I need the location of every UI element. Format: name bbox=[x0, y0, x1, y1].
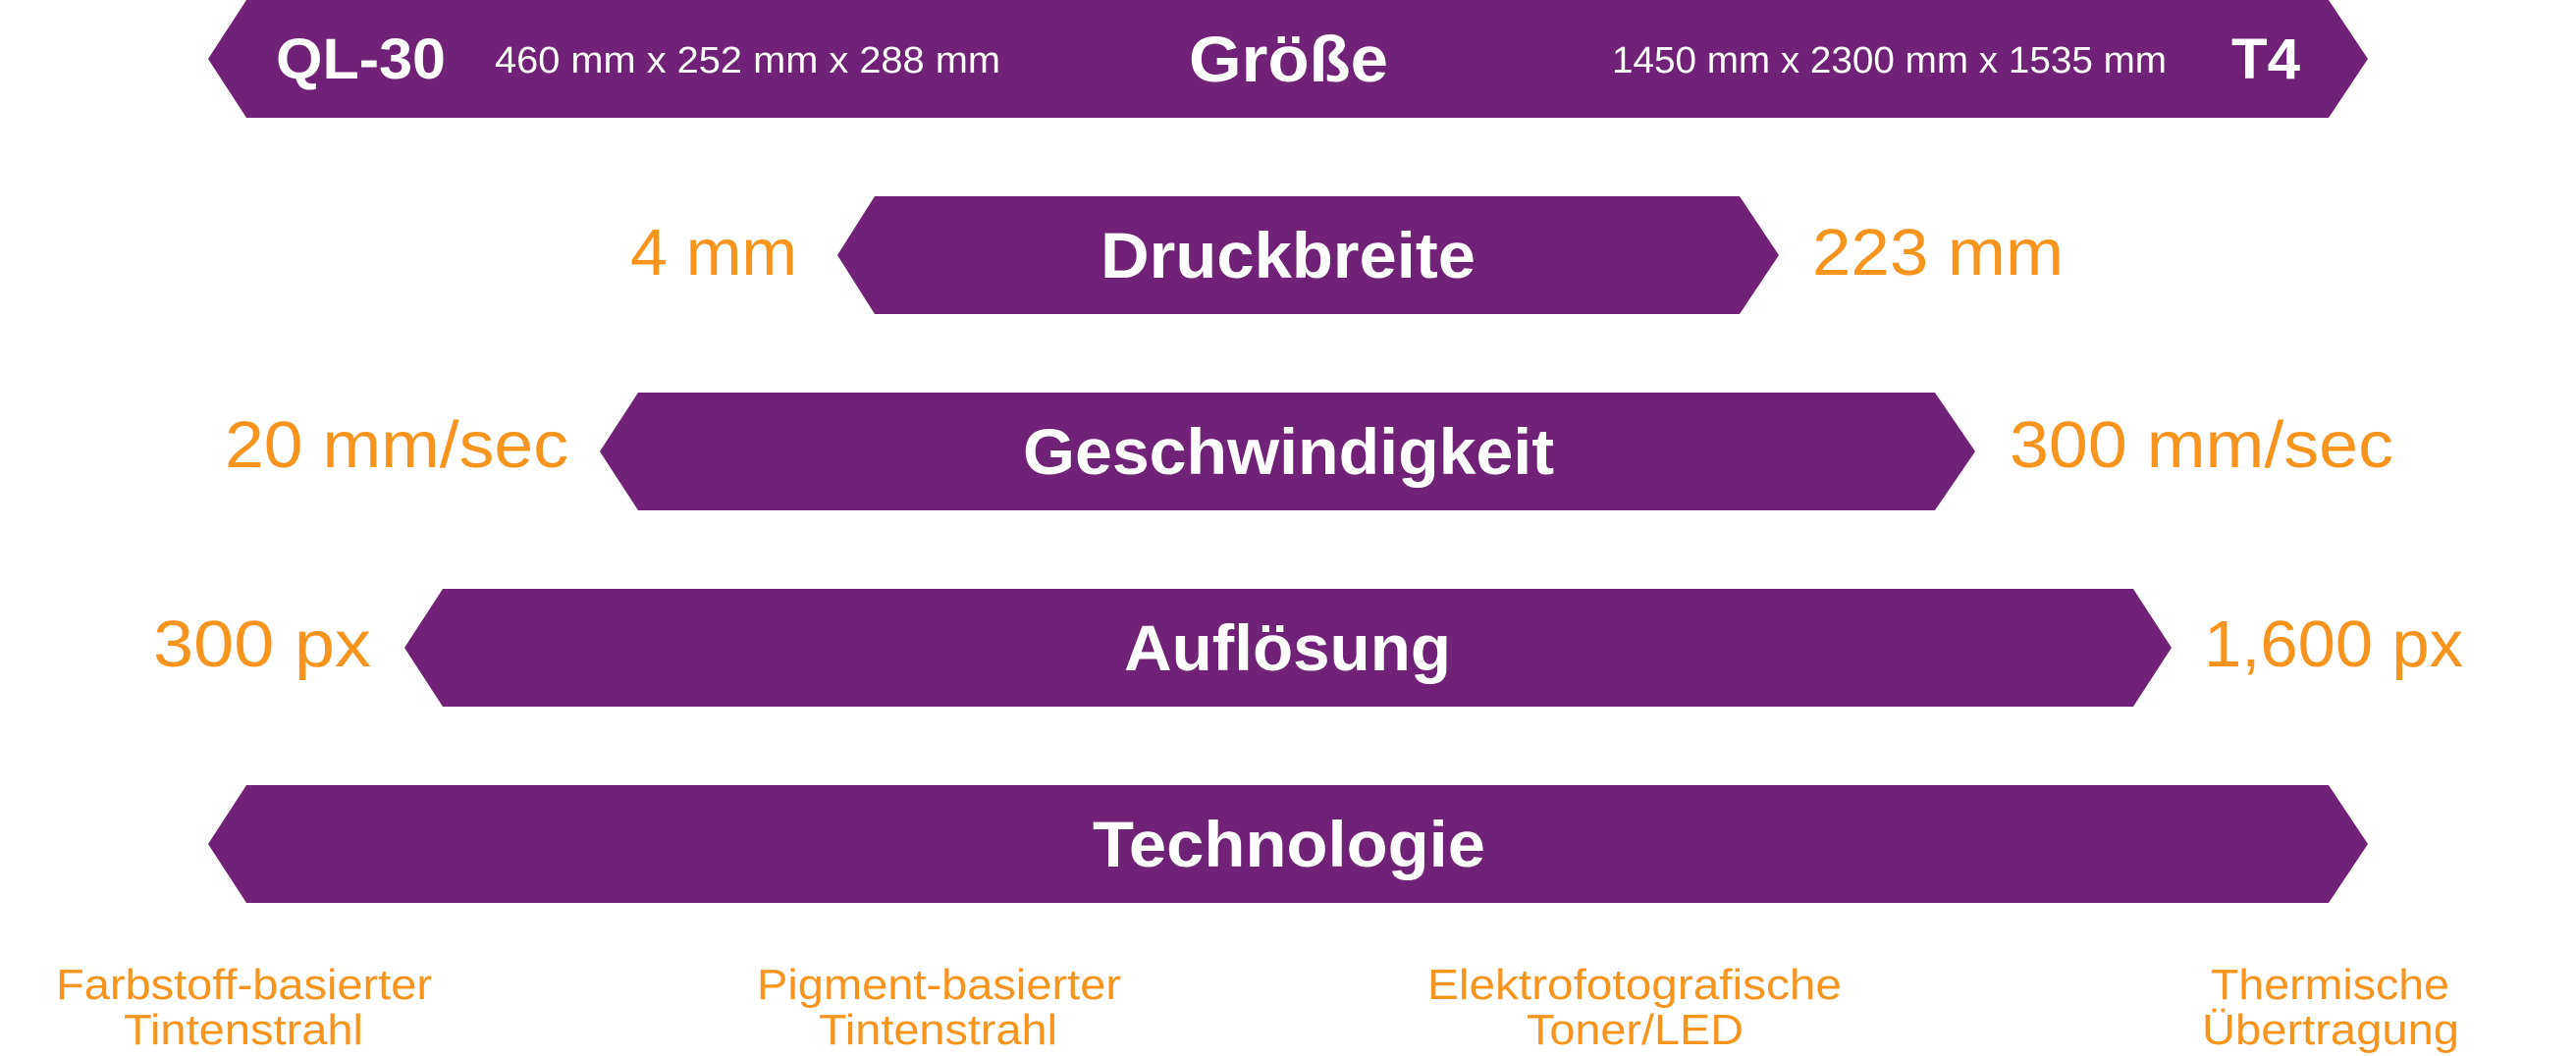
row: Auflösung bbox=[153, 589, 2463, 707]
minimum value: 20 mm/sec: 20 mm/sec bbox=[225, 408, 568, 482]
minimum value: 4 mm: 4 mm bbox=[630, 216, 797, 290]
technology label: Pigment-basierter Tintenstrahl bbox=[757, 961, 1121, 1054]
technology label: Thermische Übertragung bbox=[2202, 961, 2459, 1054]
label: QL-30: QL-30 bbox=[276, 27, 446, 91]
technology label: Farbstoff-basierter Tintenstrahl: Farbstoff-basierter bbox=[56, 961, 432, 1009]
heading: Druckbreite: Druckbreite bbox=[1100, 219, 1476, 291]
banner shape: Auflösung bbox=[404, 589, 2172, 707]
dimensions: QL-30: 460 mm x 252 mm x 288 mm bbox=[495, 40, 1000, 81]
banner shape: Größe bbox=[208, 0, 2368, 118]
heading: Technologie: Technologie bbox=[1093, 808, 1485, 880]
technology label: Thermische Übertragung: Thermische bbox=[2211, 961, 2449, 1009]
technology label: Thermische Übertragung: Übertragung bbox=[2202, 1006, 2459, 1054]
technology label: Farbstoff-basierter Tintenstrahl: Tintenstrahl bbox=[124, 1006, 363, 1054]
heading: Größe: Größe bbox=[1189, 23, 1388, 95]
heading: Auflösung: Auflösung bbox=[1124, 611, 1451, 684]
technology label: Farbstoff-basierter Tintenstrahl bbox=[56, 961, 432, 1054]
row: Größe bbox=[208, 0, 2368, 118]
maximum value: 300 mm/sec: 300 mm/sec bbox=[2010, 408, 2393, 482]
label: T4: T4 bbox=[2231, 27, 2300, 91]
technology label: Pigment-basierter Tintenstrahl: Tintenstrahl bbox=[819, 1006, 1057, 1054]
row: Technologie bbox=[208, 785, 2368, 903]
maximum value: 223 mm: 223 mm bbox=[1812, 216, 2064, 290]
maximum value: 1,600 px: 1,600 px bbox=[2204, 607, 2463, 681]
technology label: Elektrofotografische Toner/LED: Toner/LED bbox=[1527, 1006, 1744, 1054]
minimum value: 300 px: 300 px bbox=[153, 607, 371, 681]
technology label: Elektrofotografische Toner/LED bbox=[1427, 961, 1842, 1054]
dimensions: T4: 1450 mm x 2300 mm x 1535 mm bbox=[1612, 40, 2167, 81]
technology label: Elektrofotografische Toner/LED: Elektrofotografische bbox=[1427, 961, 1842, 1009]
banner shape: Geschwindigkeit bbox=[600, 393, 1975, 510]
row: Druckbreite bbox=[630, 196, 2064, 314]
heading: Geschwindigkeit: Geschwindigkeit bbox=[1023, 415, 1554, 488]
technology label: Pigment-basierter Tintenstrahl: Pigment-basierter bbox=[757, 961, 1121, 1009]
banner shape: Druckbreite bbox=[837, 196, 1779, 314]
row: Geschwindigkeit bbox=[225, 393, 2393, 510]
banner shape: Technologie bbox=[208, 785, 2368, 903]
